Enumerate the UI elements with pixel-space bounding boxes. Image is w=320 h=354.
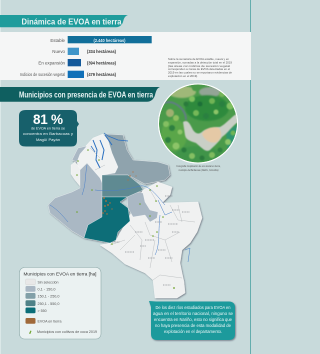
text block: nota: Sobre la sumatoria de EVOA estable, nueva y en [168,57,229,61]
municipal boundaries [90,148,195,280]
callout: estudios EVOA en agua: De los diez ríos estudiados para EVOA en [156,305,231,310]
bar: Estable [50,36,152,43]
text block: nota: expansión, sumadas a la detección total en el 2019 [168,60,232,64]
callout: 81 %: de EVOA en tierra se [31,125,65,130]
callout: 81 % [19,110,79,146]
callout: 81 %: Magüí Payán [36,137,60,142]
bar: Estable: Estable [50,38,66,43]
text block: nota: explotación en el 2019). [168,74,198,78]
callout: estudios EVOA en agua [149,301,235,340]
bar: Indicios de sucesión vegetal: (479 hectáreas) [87,72,116,77]
bar: En expansión: (394 hectáreas) [87,60,116,66]
bar: En expansión [38,59,116,66]
bar: Estable: (2.440 hectáreas) [94,38,126,43]
map region: noreste 150.1-250 [102,134,170,184]
legend item: mayor a 550: > 550 [38,309,47,313]
caption: fotografía: municipio de Barbacoas (Nariño, Colombia) [178,168,219,172]
photo: explotación de oro aluvial [158,84,238,164]
caption: fotografía [176,164,221,172]
text block: nota: corresponden a zonas de EVOA detectadas en el [168,67,230,71]
small map labels [112,196,190,285]
callout: estudios EVOA en agua: agua en el territorio nacional, ninguno se [153,311,234,316]
map region: centro 0.1-150 [127,192,158,222]
heading: Municipios con presencia de EVOA en tierra [0,87,160,102]
map region: oeste 0.1-150 [48,163,103,238]
bar: Nuevo: (334 hectáreas) [87,49,116,54]
bar: Indicios de sucesión vegetal [20,71,116,78]
bar: Nuevo: Nuevo [52,49,66,54]
legend item: cultivos de coca: Municipios con cultivos de coca 2019 [37,330,97,334]
legend item: 150.1 - 250.0: 150,1 - 250,0 [38,295,60,299]
callout: estudios EVOA en agua: no haya presencia de esta modalidad de [155,323,232,328]
legend item: sin selección: Sin selección [38,280,58,284]
heading: Dinámica de EVOA en tierra: Dinámica de EVOA en tierra [22,17,122,26]
callout: estudios EVOA en agua: explotación en el departamento. [164,329,222,334]
bar: Nuevo [52,48,116,55]
rivers [50,165,190,262]
legend item: 0.1 - 150.0: 0,1 - 150,0 [38,288,56,292]
callout: 81 %: concentra en Barbacoas y [23,131,73,136]
legend item: 250.1 - 550.0: 250,1 - 550,0 [38,302,60,306]
legend: Municipios con EVOA en tierra [20,268,101,339]
text block: nota: 2019 en las cuales no se reportaron evidencias de [168,71,232,75]
map region: sin selección sur y este [100,182,202,298]
map region: costa [71,162,84,186]
heading: Dinámica de EVOA en tierra [0,15,128,27]
map region: mayor a 550 [84,197,130,243]
caption: fotografía: Fotografía: Explotación de oro aluvial en tierra, [176,164,221,168]
text block: nota [168,57,232,78]
text block: nota: (las áreas con indicios de sucesión vegetal [168,64,230,68]
bar: Indicios de sucesión vegetal: Indicios de sucesión vegetal [20,72,65,77]
callout: estudios EVOA en agua: encuentra en Nariño, esto no significa que [154,317,233,322]
map region: 250.1-550 [102,175,143,197]
callout: 81 %: 81 % [33,112,63,127]
legend: Municipios con EVOA en tierra: Municipios con EVOA en tierra [ha] [24,272,96,277]
panel: dinámica de EVOA [0,32,251,80]
EVOA en tierra points [102,171,136,215]
municipios con cultivos de coca [76,149,175,289]
heading: Municipios con presencia de EVOA en tierra: Municipios con presencia de EVOA en tierra [19,90,153,100]
map region: norte sin selección [77,134,118,183]
bar: En expansión: En expansión [38,60,66,66]
legend item: EVOA en tierra: EVOA en tierra [38,320,62,324]
map: municipios de Nariño [48,133,202,298]
